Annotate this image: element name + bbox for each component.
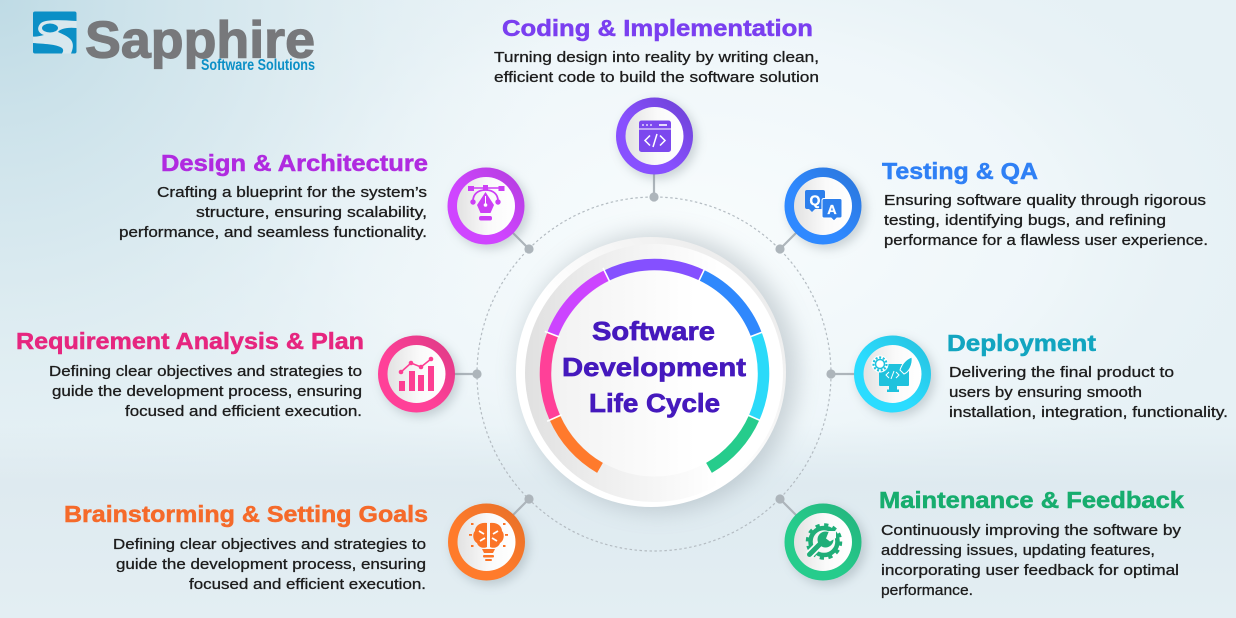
text block: Testing & QA: testing, identifying bugs, and refining — [884, 212, 1166, 229]
hub title: Software — [592, 316, 715, 346]
badge: testing — [784, 168, 866, 249]
text block: Maintenance & Feedback: incorporating user feedback for optimal — [881, 562, 1179, 579]
icon: monitor with gear and rocket — [873, 357, 912, 392]
segmented progress ring — [545, 264, 764, 468]
text block: Design & Architecture: Crafting a blueprint for the system’s — [157, 184, 427, 201]
icon: Q and A speech bubbles: Q — [810, 192, 821, 208]
text block: Brainstorming & Setting Goals — [64, 501, 428, 593]
text block: Testing & QA: Ensuring software quality through rigorous — [884, 192, 1206, 209]
text block: Requirement Analysis & Plan: Requirement Analysis & Plan — [16, 328, 364, 354]
badge: requirement analysis — [378, 336, 459, 417]
text block: Brainstorming & Setting Goals: guide the development process, ensuring — [116, 556, 426, 573]
text block: Coding & Implementation — [494, 15, 819, 86]
hub title — [562, 316, 746, 418]
text block: Maintenance & Feedback: Continuously improving the software by — [881, 522, 1182, 539]
hub title: Life Cycle — [589, 388, 720, 418]
text block: Deployment — [947, 330, 1228, 421]
badge: deployment — [854, 336, 935, 417]
text block: Coding & Implementation: Coding & Implementation — [502, 15, 813, 41]
text block: Maintenance & Feedback: Maintenance & Feedback — [879, 487, 1184, 513]
text block: Deployment: Delivering the final product to — [949, 364, 1174, 381]
text block: Design & Architecture: Design & Architecture — [161, 150, 428, 176]
badge: coding — [616, 98, 697, 179]
text block: Testing & QA: performance for a flawless user experience. — [884, 232, 1208, 249]
icon: vector pen tool — [468, 185, 504, 220]
icon: bar chart with trend line — [399, 357, 434, 391]
icon: gear with wrench — [808, 525, 840, 558]
hub title: Development — [562, 352, 746, 382]
dashed orbit with connector nodes — [450, 170, 858, 551]
text block: Design & Architecture: performance, and seamless functionality. — [119, 224, 427, 241]
text block: Deployment: installation, integration, functionality. — [949, 404, 1228, 421]
icon: Q and A speech bubbles — [805, 190, 842, 221]
badge: design — [448, 168, 529, 249]
logo tagline: Software Solutions — [201, 57, 315, 74]
icon: Q and A speech bubbles: A — [827, 202, 837, 217]
text block: Maintenance & Feedback: addressing issues, updating features, — [881, 542, 1155, 559]
text block: Deployment: Deployment — [947, 330, 1096, 356]
text block: Testing & QA: Testing & QA — [882, 158, 1038, 184]
text block: Requirement Analysis & Plan — [16, 328, 364, 420]
text block: Testing & QA — [882, 158, 1208, 249]
badge: maintenance — [784, 504, 866, 585]
icon: logo S mark — [33, 12, 76, 54]
logo wordmark: Sapphire — [85, 12, 315, 70]
text block: Design & Architecture: structure, ensuring scalability, — [196, 204, 427, 221]
text block: Brainstorming & Setting Goals: Brainstorming & Setting Goals — [64, 501, 428, 527]
text block: Deployment: users by ensuring smooth — [949, 384, 1142, 401]
text block: Brainstorming & Setting Goals: Defining clear objectives and strategies to — [113, 536, 426, 553]
text block: Maintenance & Feedback: performance. — [881, 582, 973, 599]
text block: Coding & Implementation: efficient code to build the software solution — [494, 69, 819, 86]
text block: Design & Architecture — [119, 150, 428, 241]
text block: Requirement Analysis & Plan: Defining clear objectives and strategies to — [49, 363, 362, 380]
badge: brainstorming — [448, 504, 529, 585]
logo: Sapphire Software Solutions — [33, 12, 315, 74]
text block: Requirement Analysis & Plan: guide the development process, ensuring — [52, 383, 362, 400]
icon: brain light bulb — [469, 523, 508, 561]
text block: Requirement Analysis & Plan: focused and efficient execution. — [125, 403, 362, 420]
text block: Coding & Implementation: Turning design into reality by writing clean, — [494, 49, 819, 66]
icon: code window — [639, 120, 671, 152]
central hub — [516, 232, 798, 512]
text block: Maintenance & Feedback — [879, 487, 1184, 599]
text block: Brainstorming & Setting Goals: focused and efficient execution. — [189, 576, 426, 593]
